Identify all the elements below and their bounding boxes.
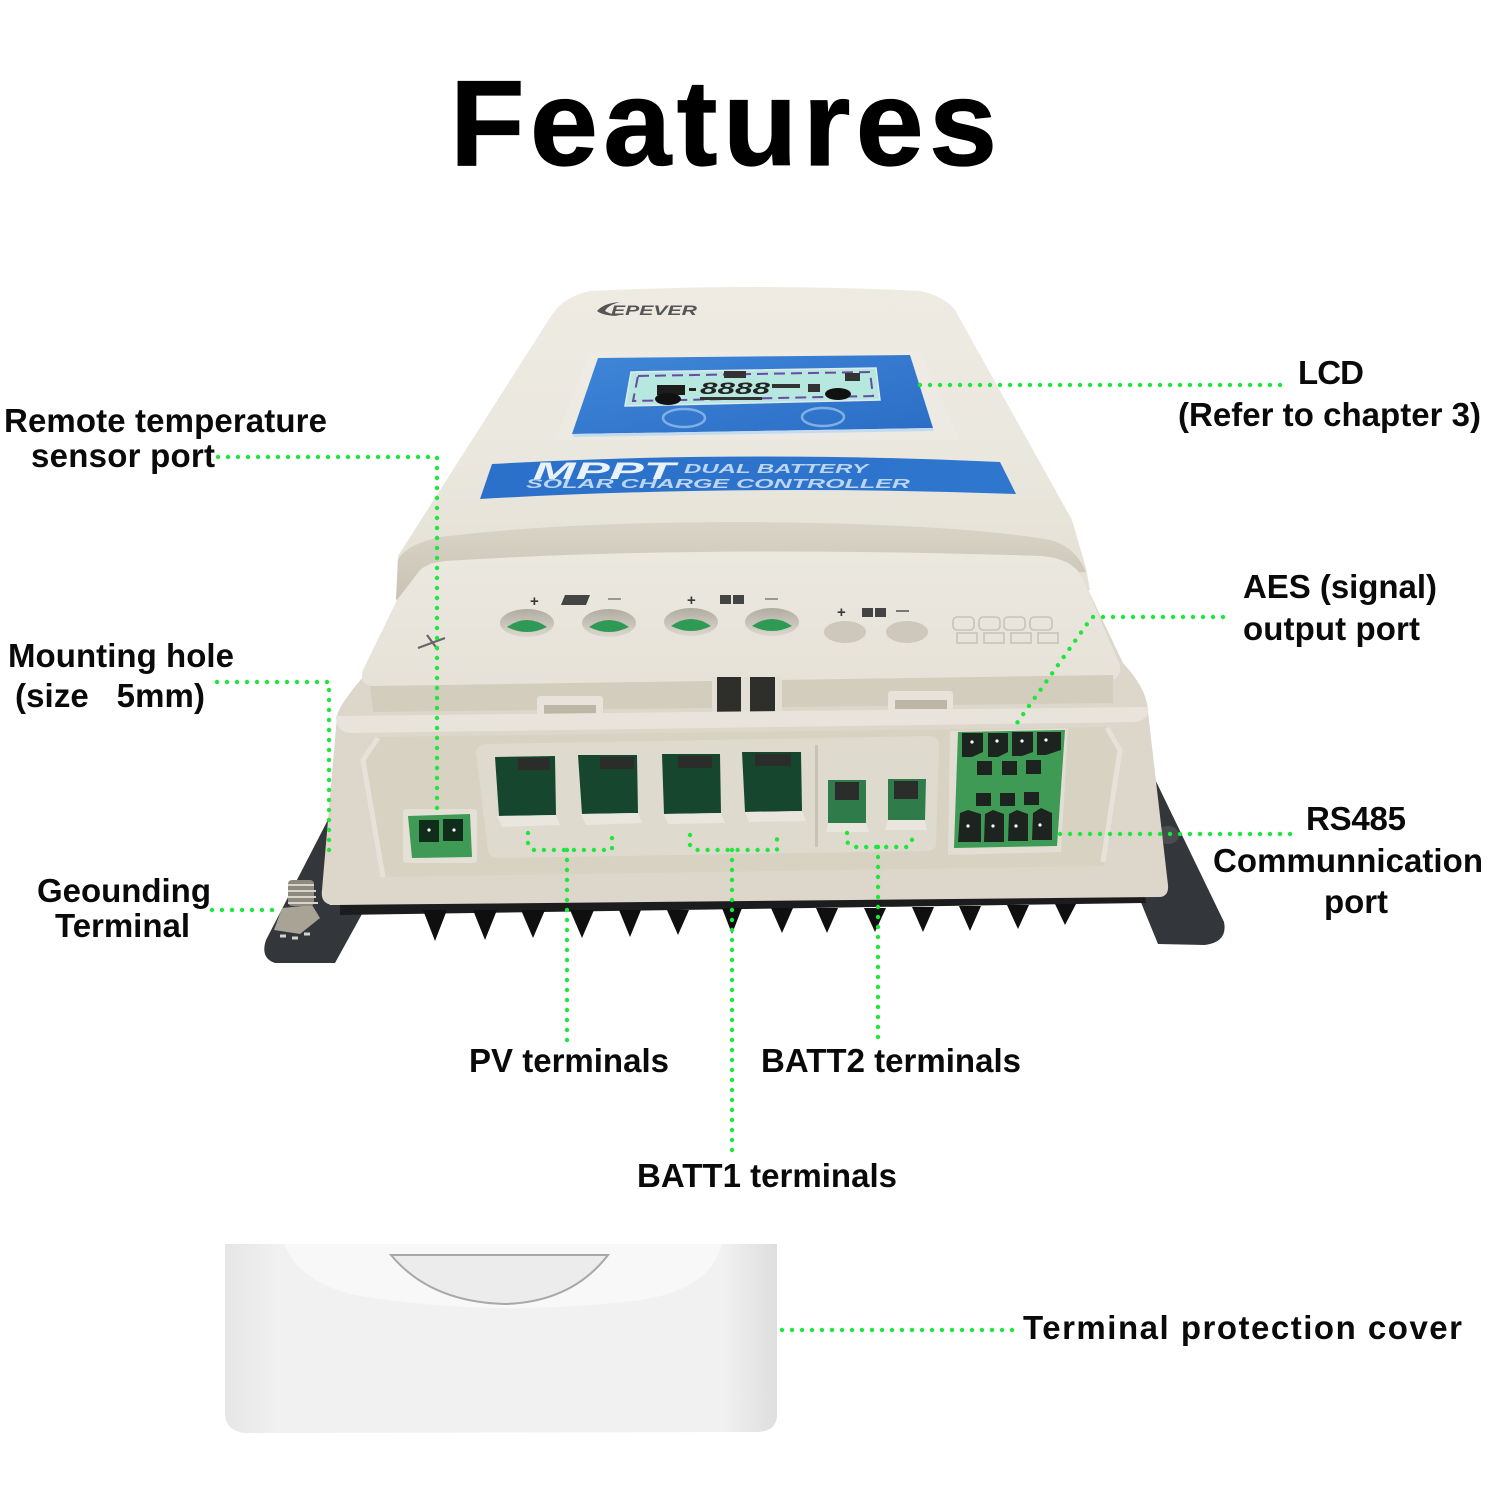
terminal symbols: + bbox=[687, 592, 696, 609]
label: BATT2 terminals: BATT2 terminals bbox=[761, 1042, 1021, 1079]
blue lcd panel bbox=[572, 355, 934, 437]
label: LCD: LCD bbox=[1298, 354, 1364, 391]
front rim bbox=[336, 707, 1148, 733]
label: remote temperature sensor port: Remote temperature bbox=[4, 402, 327, 439]
leader: mounting hole bbox=[217, 682, 329, 852]
right mounting hole bbox=[1157, 826, 1179, 844]
leader: BATT2 terminals bbox=[847, 833, 912, 1045]
leader: BATT1 terminals bbox=[690, 835, 777, 1155]
leader: grounding terminal bbox=[212, 908, 273, 912]
label: remote temperature sensor port bbox=[4, 402, 327, 474]
brand logo bbox=[597, 302, 698, 318]
label: PV terminals: PV terminals bbox=[469, 1042, 669, 1079]
label: RS485 communication port: port bbox=[1324, 883, 1388, 920]
label: grounding terminal: Terminal bbox=[55, 907, 190, 944]
label: mounting hole: Mounting hole bbox=[8, 637, 234, 674]
title: Features bbox=[450, 55, 997, 191]
brand logo: EPEVER bbox=[611, 302, 698, 318]
leader: remote temperature sensor port bbox=[218, 457, 437, 810]
label: RS485 communication port: RS485 bbox=[1306, 800, 1406, 837]
lcd buttons bbox=[663, 409, 705, 427]
front face bbox=[363, 727, 1121, 877]
terminal symbols bbox=[530, 592, 909, 621]
centre slots bbox=[712, 677, 782, 713]
cable clamp recess bbox=[370, 675, 1113, 712]
right clip bbox=[888, 691, 953, 712]
leader: AES signal output port bbox=[1012, 617, 1223, 730]
leader: PV terminals bbox=[528, 833, 612, 1045]
label: AES signal output port bbox=[1243, 568, 1437, 647]
leader: RS485 communication port bbox=[1060, 832, 1293, 836]
blue product band: DUAL BATTERY bbox=[684, 461, 870, 476]
lcd surround bbox=[555, 352, 960, 440]
label: AES signal output port: output port bbox=[1243, 610, 1420, 647]
terminal recess bbox=[476, 736, 939, 858]
terminal access holes bbox=[500, 608, 928, 643]
label: mounting hole: (size 5mm) bbox=[15, 677, 205, 714]
label: grounding terminal bbox=[37, 872, 211, 944]
label: remote temperature sensor port: sensor port bbox=[31, 437, 215, 474]
label: mounting hole bbox=[8, 637, 234, 714]
grounding screw bbox=[274, 880, 320, 938]
blue product band bbox=[480, 456, 1016, 499]
terminal protection cover bbox=[225, 1244, 777, 1433]
label: grounding terminal: Geounding bbox=[37, 872, 211, 909]
cover finger notch bbox=[391, 1255, 608, 1304]
lcd screen: 8888 bbox=[700, 379, 771, 398]
label: AES signal output port: AES (signal) bbox=[1243, 568, 1437, 605]
PV and BATT1 terminal wells bbox=[495, 752, 806, 827]
top terminal panel bbox=[362, 552, 1120, 686]
lid shell bbox=[396, 287, 1090, 600]
heat sink base bbox=[264, 773, 1225, 963]
label: LCD: (Refer to chapter 3) bbox=[1178, 396, 1481, 433]
remote temperature sensor connector bbox=[403, 809, 477, 863]
lcd screen bbox=[625, 368, 880, 406]
BATT2 terminal wells bbox=[826, 779, 927, 832]
label: BATT1 terminals: BATT1 terminals bbox=[637, 1157, 897, 1194]
label: LCD bbox=[1178, 354, 1481, 433]
blue product band: MPPT bbox=[533, 458, 680, 485]
heat sink fins bbox=[423, 904, 1076, 941]
leader: LCD bbox=[920, 383, 1282, 387]
terminal symbols: + bbox=[530, 593, 539, 610]
blue product band: SOLAR CHARGE CONTROLLER bbox=[526, 476, 911, 491]
com port legend bbox=[953, 617, 1058, 643]
label: RS485 communication port bbox=[1213, 800, 1483, 920]
body shell bbox=[322, 552, 1168, 905]
label: terminal protection cover: Terminal protection cover bbox=[1023, 1309, 1462, 1346]
tool icon bbox=[418, 635, 445, 650]
solar charge controller device bbox=[264, 287, 1225, 963]
left clip bbox=[537, 696, 603, 717]
RS485 and AES connector block bbox=[948, 728, 1068, 855]
terminal symbols: + bbox=[837, 604, 846, 621]
label: RS485 communication port: Communnication bbox=[1213, 842, 1483, 879]
leader: protection cover bbox=[782, 1328, 1015, 1332]
